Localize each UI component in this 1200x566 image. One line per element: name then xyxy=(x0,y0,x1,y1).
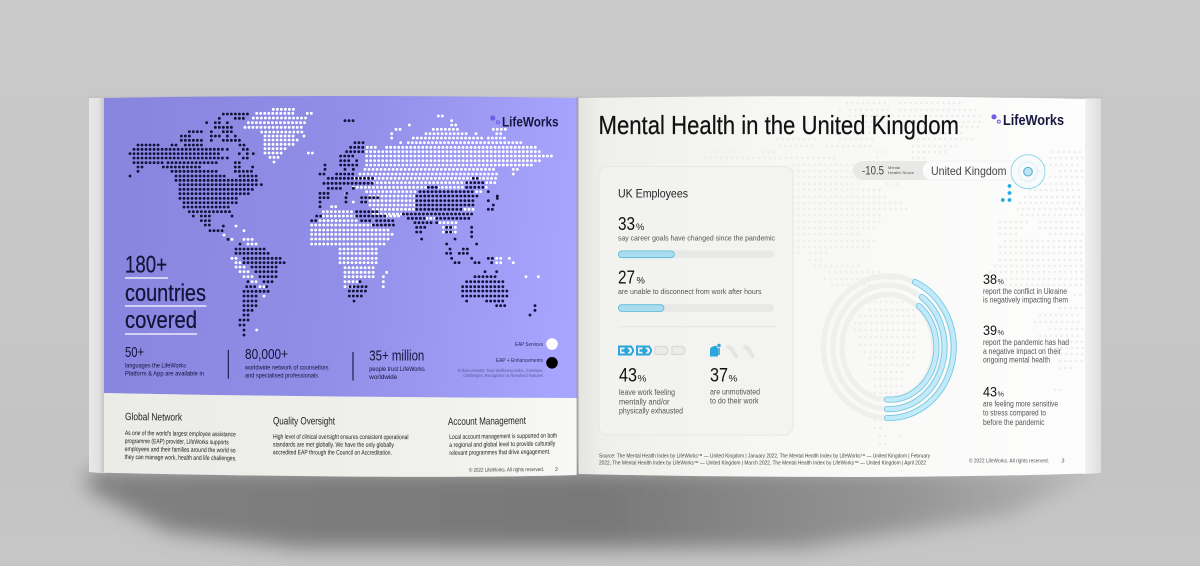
text block: Global Network: they can manage work, health and life challenges. xyxy=(124,454,237,462)
text block: Account Management: Local account management is supported on both xyxy=(449,432,557,441)
stat: 80,000+ counsellors xyxy=(244,346,329,380)
footer: left page: 2 xyxy=(555,467,558,473)
radial bar chart xyxy=(823,276,954,418)
stat: 43% sensitive to stress: to stress compared to xyxy=(983,409,1047,418)
stat: 33% career goals xyxy=(618,214,775,258)
stat: 43% sensitive to stress: before the pandemic xyxy=(983,418,1045,427)
footer: left page: © 2022 LifeWorks. All rights reserved. xyxy=(469,466,544,474)
score pill: Mental xyxy=(888,166,900,170)
stat: 38% Ukraine: % xyxy=(998,279,1004,286)
text block: Global Network: employees and their families around the world so xyxy=(125,446,236,454)
stat: 38% Ukraine: is negatively impacting them xyxy=(983,296,1068,305)
legend: EAP + Enhancements xyxy=(496,358,543,364)
divider two xyxy=(352,352,354,380)
score pill: United Kingdom xyxy=(931,164,1006,178)
stat: 80,000+ counsellors: and specialised professionals xyxy=(245,373,319,380)
text block: Quality Oversight: standards are met globally. We have the only globally xyxy=(273,441,395,449)
stat: 39% pandemic impact: report the pandemic has had xyxy=(983,338,1069,347)
stat: 35+ million xyxy=(368,348,425,381)
panel: left page xyxy=(104,96,577,477)
source note xyxy=(599,454,930,466)
heading: 180+ countries covered: covered xyxy=(125,307,197,334)
text block: Global Network: As one of the world's largest employee assistance xyxy=(125,430,236,438)
stat: 43% sensitive to stress: 43 xyxy=(983,384,997,400)
legend: Challenges, Recognition & Newsfeed features xyxy=(463,373,543,378)
left page edge xyxy=(89,98,105,474)
icon: unmotivated figures xyxy=(710,344,754,357)
text block: Account Management xyxy=(448,414,558,457)
panel: UK Employees card xyxy=(599,166,793,435)
stat: 43% exhausted: physically exhausted xyxy=(619,405,683,415)
stat: 39% pandemic impact: 39 xyxy=(983,322,997,338)
stat: 38% Ukraine: report the conflict in Ukraine xyxy=(983,287,1067,296)
stat: 39% pandemic impact: a negative impact on their xyxy=(983,347,1061,356)
legend: Enhancements: Total Wellbeing Index, CareNow, xyxy=(458,368,543,373)
text block: Account Management: Account Management xyxy=(448,415,526,428)
panel: right page xyxy=(578,96,1085,477)
stat: 50+ languages xyxy=(125,344,204,378)
stat: 37% unmotivated: to do their work xyxy=(710,395,759,405)
text block: Global Network: Global Network xyxy=(125,411,183,424)
text block: Quality Oversight: High level of clinical oversight ensures consistent operational xyxy=(273,434,409,441)
logo: LifeWorks right: LifeWorks xyxy=(1003,113,1064,129)
stat: 50+ languages: 50+ xyxy=(125,344,144,361)
heading: 180+ countries covered: countries xyxy=(125,280,206,307)
source note: Source: The Mental Health Index by LifeWorks™ — United Kingdom | January 2022, The Mental Health Index by LifeWorks™ — United Kingdom | February xyxy=(599,454,930,460)
stat: 43% exhausted xyxy=(619,366,683,415)
world map xyxy=(130,109,552,335)
stat: 43% exhausted: leave work feeling xyxy=(619,387,675,397)
stat: 80,000+ counsellors: 80,000+ xyxy=(245,346,288,363)
stat: 43% exhausted: 43 xyxy=(619,366,637,387)
score pill: Health Score xyxy=(888,171,914,175)
heading: 180+ countries covered: 180+ xyxy=(125,252,167,278)
stat: 35+ million: worldwide xyxy=(368,374,398,381)
stat: 39% pandemic impact xyxy=(983,322,1069,364)
stat: 37% unmotivated: 37 xyxy=(710,366,728,387)
stat: 33% career goals: 33 xyxy=(618,214,635,234)
stat: 43% sensitive to stress xyxy=(983,384,1058,427)
source note: 2022, The Mental Health Index by LifeWorks™ — United Kingdom | March 2022, The Mental Health Index by LifeWorks™ — United Kingdom | April 2022 xyxy=(599,460,926,466)
stat: 80,000+ counsellors: worldwide network of counsellors xyxy=(244,364,329,371)
spine shadow xyxy=(576,97,579,476)
text block: Quality Oversight: Quality Oversight xyxy=(273,415,335,428)
stat: 37% unmotivated: are unmotivated xyxy=(710,386,760,396)
stat: 38% Ukraine: 38 xyxy=(983,271,997,287)
legend: EAP Services xyxy=(515,342,543,348)
heading: 180+ countries covered xyxy=(125,252,206,334)
footer: right page: © 2022 LifeWorks. All rights reserved. xyxy=(969,458,1049,464)
book shadow xyxy=(88,96,1102,548)
text block: Account Management: relevant programmes that drive engagement. xyxy=(449,449,551,457)
right page edge xyxy=(1084,98,1101,474)
stat: 43% exhausted: % xyxy=(638,374,647,385)
location marker xyxy=(1011,155,1045,189)
divider one xyxy=(227,350,229,378)
text block: Global Network xyxy=(124,411,237,462)
stat: 38% Ukraine xyxy=(983,271,1068,305)
white dots: EAP services xyxy=(224,109,552,330)
stat: 37% unmotivated: % xyxy=(728,374,738,385)
text block: Account Management: a regional and global level to provide culturally xyxy=(449,440,556,449)
UK marker dots xyxy=(1001,184,1011,202)
score pill xyxy=(853,161,1036,180)
stat: 33% career goals: say career goals have changed since the pandemic xyxy=(618,234,775,243)
text block: Quality Oversight xyxy=(273,415,409,457)
stat: 27% unable to disconnect: are unable to disconnect from work after hours xyxy=(618,287,762,296)
black dots: EAP + enhancements xyxy=(130,114,538,335)
card heading: UK Employees xyxy=(618,186,688,200)
logo: LifeWorks left: LifeWorks xyxy=(502,114,559,130)
stat: 37% unmotivated xyxy=(710,366,760,405)
title: Mental Health in the United Kingdom xyxy=(598,110,959,140)
stat: 35+ million: 35+ million xyxy=(369,348,424,365)
stat: 50+ languages: Platform & App are available in xyxy=(125,371,204,378)
stat: 35+ million: people trust LifeWorks xyxy=(369,366,425,373)
background dot map xyxy=(705,103,1083,444)
text block: Global Network: programme (EAP) provider, LifeWorks supports xyxy=(125,438,229,446)
score pill: -10.5 xyxy=(862,165,884,177)
footer: right page: 3 xyxy=(1062,458,1064,464)
text block: Quality Oversight: accredited EAP through the Council on Accreditation. xyxy=(273,449,392,457)
stat: 27% unable to disconnect: % xyxy=(636,275,645,285)
stat: 39% pandemic impact: ongoing mental health xyxy=(983,355,1050,364)
stat: 50+ languages: languages the LifeWorks xyxy=(125,362,187,369)
legend xyxy=(458,338,558,378)
stat: 27% unable to disconnect: 27 xyxy=(618,267,635,287)
stat: 43% exhausted: mentally and/or xyxy=(619,396,670,406)
stat: 43% sensitive to stress: % xyxy=(998,392,1004,399)
stat: 33% career goals: % xyxy=(636,222,644,232)
stat: 39% pandemic impact: % xyxy=(998,330,1004,337)
icon: batteries xyxy=(619,346,685,355)
stat: 27% unable to disconnect xyxy=(618,267,774,312)
stat: 43% sensitive to stress: are feeling more sensitive xyxy=(983,400,1058,409)
